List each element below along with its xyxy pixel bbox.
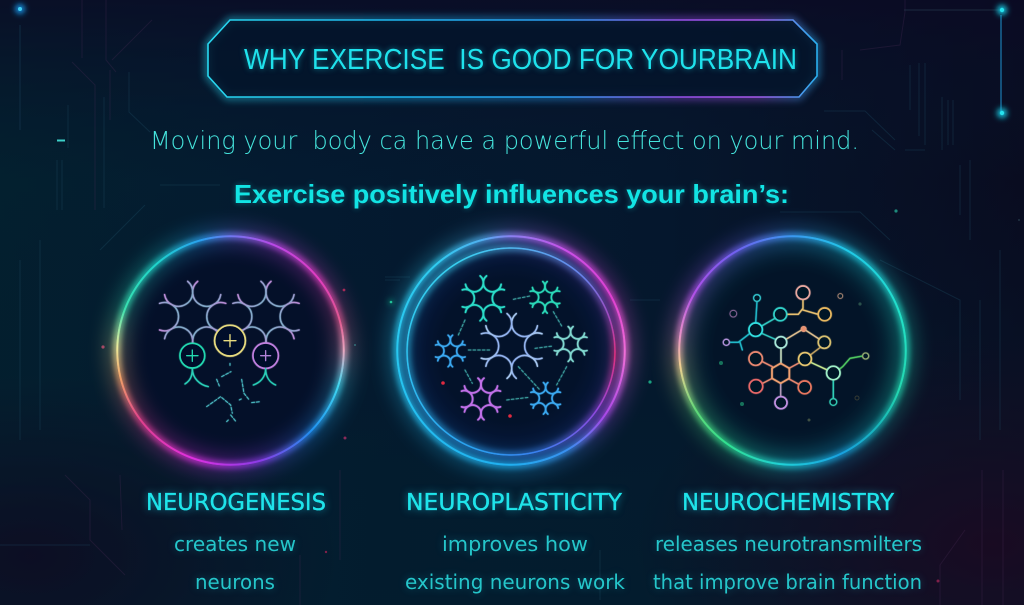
text: neurons: neurons: [195, 570, 275, 594]
panel: neurochemistry: [652, 217, 926, 594]
text: creates new: creates new: [174, 532, 296, 556]
faint particles: [719, 302, 862, 422]
ring: neurochemistry inner line: [687, 246, 898, 456]
marker dots: [441, 381, 512, 418]
text: releases neurotransmilters: releases neurotransmilters: [655, 532, 922, 556]
ring: neurochemistry outer: [678, 235, 907, 466]
label: neurochemistry: NEUROCHEMISTRY: [682, 490, 895, 516]
icon: connected neuron network: [430, 272, 593, 424]
text: improves how: improves how: [442, 532, 588, 556]
heading: Exercise positively influences your brain’s:: [234, 179, 789, 209]
subtitle: Moving your body ca have a powerful effect on your mind.: [150, 126, 859, 155]
panel: neurogenesis: [97, 217, 364, 594]
ring: neuroplasticity inner: [401, 242, 622, 461]
text: existing neurons work: existing neurons work: [405, 570, 625, 594]
ring: neurogenesis inner line: [125, 244, 336, 457]
icon: new neurons with plus signs: [148, 275, 311, 422]
icon: neurotransmitter molecule: [723, 286, 869, 409]
label: neuroplasticity: NEUROPLASTICITY: [406, 490, 623, 516]
panel: neuroplasticity: [378, 217, 645, 594]
ring: neurogenesis outer glow: [116, 235, 345, 466]
ring: neuroplasticity outer: [396, 235, 626, 466]
text: that improve brain function: that improve brain function: [653, 570, 922, 594]
title banner: [200, 12, 825, 105]
title banner: WHY EXERCISE IS GOOD FOR YOURBRAIN: [244, 44, 797, 76]
label: neurogenesis: NEUROGENESIS: [146, 490, 326, 516]
